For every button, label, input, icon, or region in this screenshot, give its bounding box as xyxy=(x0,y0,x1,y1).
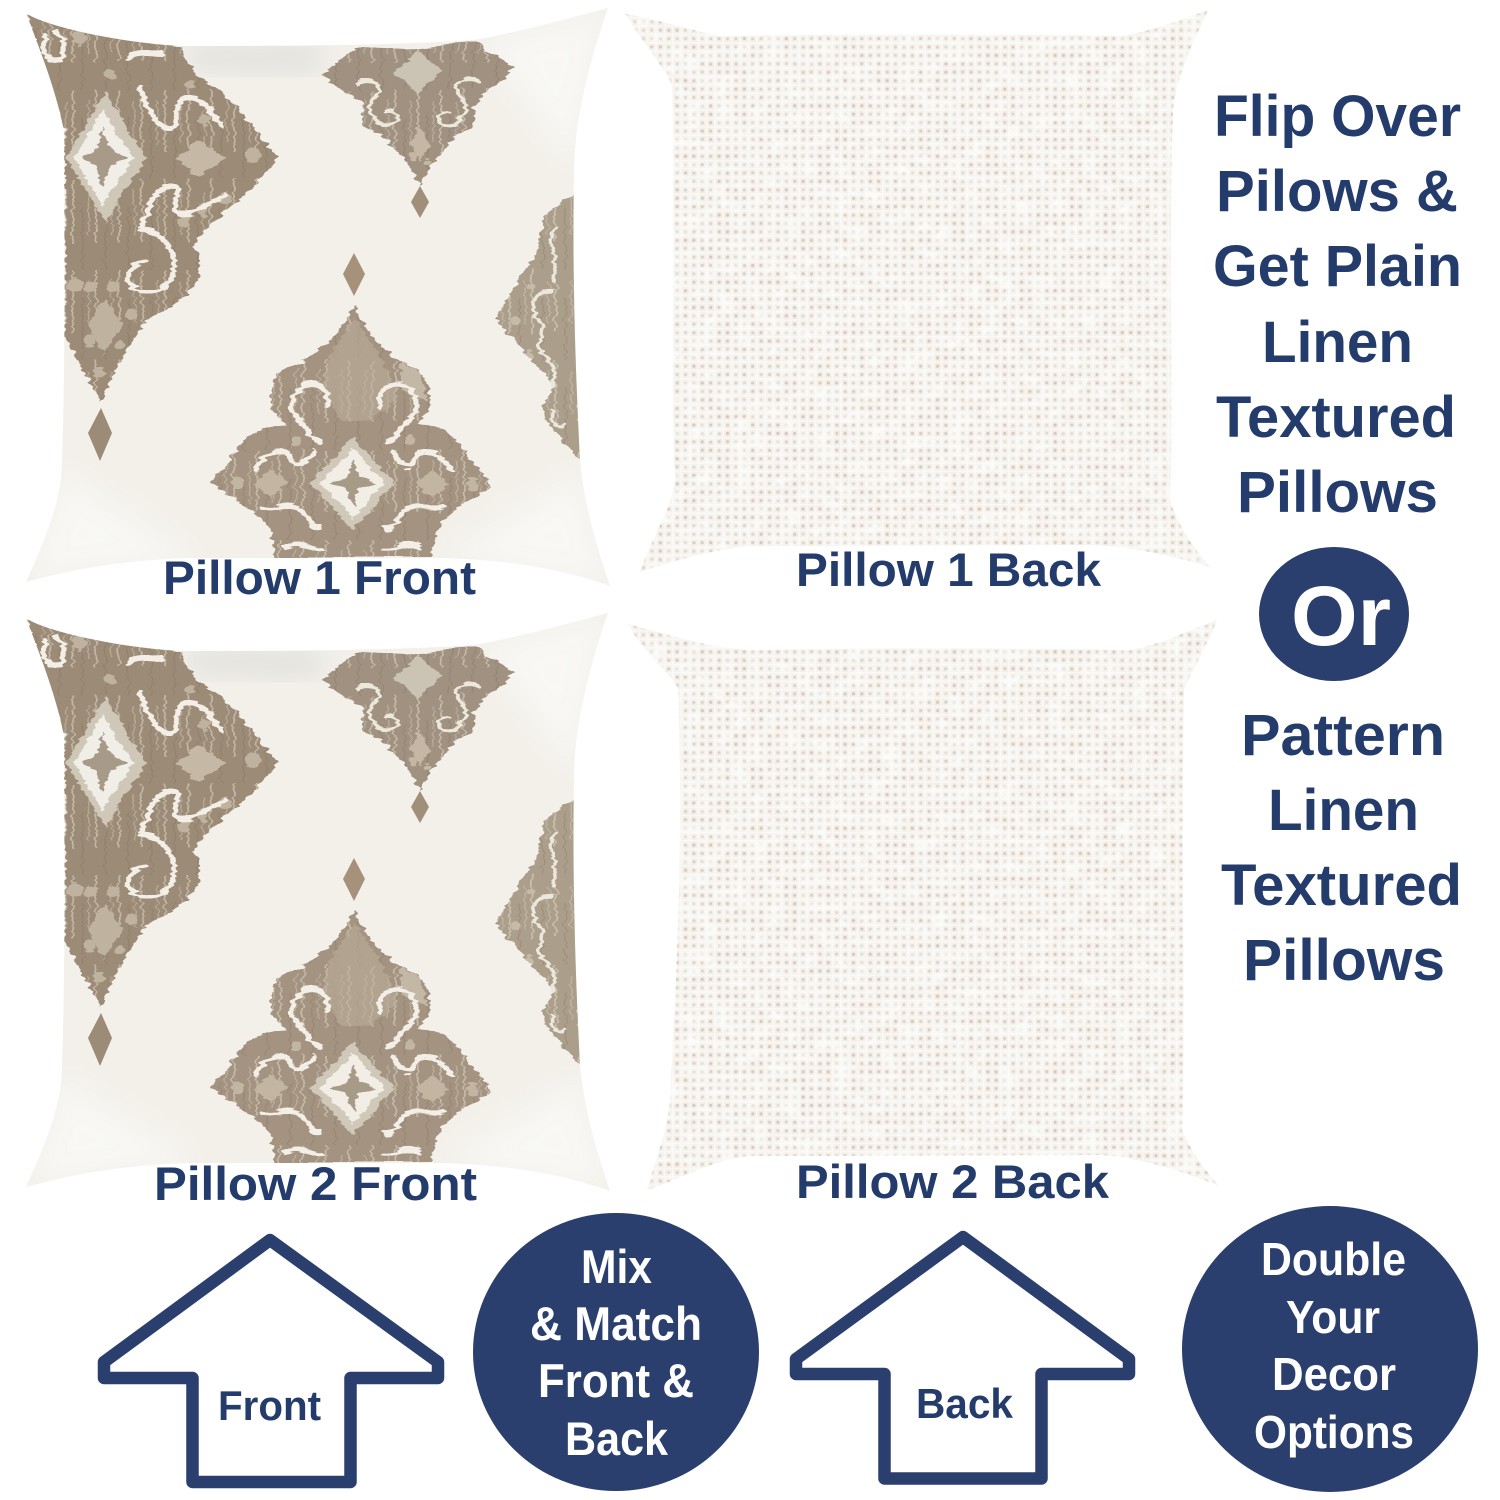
text block: pattern: Pillows xyxy=(1243,928,1445,993)
text block: flip over: Flip Over xyxy=(1214,84,1461,149)
badge: mix and match: Front & xyxy=(538,1354,694,1407)
text block: flip over: Textured xyxy=(1216,385,1456,450)
label: pillow 2 front: Pillow 2 Front xyxy=(154,1157,477,1210)
badge: mix and match: Back xyxy=(565,1412,669,1465)
pillow 2 front xyxy=(26,613,610,1193)
badge: mix and match: & Match xyxy=(530,1297,702,1350)
pillow 2 back xyxy=(620,615,1225,1195)
text block: pattern: Textured xyxy=(1221,853,1462,918)
badge: or xyxy=(1259,547,1409,681)
label: pillow 2 back: Pillow 2 Back xyxy=(796,1155,1110,1208)
text block: pattern xyxy=(1221,703,1462,993)
label: pillow 1 back: Pillow 1 Back xyxy=(796,543,1102,596)
text block: flip over: Pilows & xyxy=(1216,159,1458,224)
badge: mix and match: Mix xyxy=(581,1240,652,1293)
text block: flip over: Pillows xyxy=(1237,460,1438,525)
pillow 1 front xyxy=(26,8,610,588)
text block: pattern: Pattern xyxy=(1241,703,1445,768)
arrow: front xyxy=(104,1240,438,1482)
arrow: front: Front xyxy=(218,1382,321,1429)
badge: double your decor: Options xyxy=(1254,1406,1414,1458)
text block: flip over: Get Plain xyxy=(1213,234,1462,299)
badge: double your decor: Double xyxy=(1261,1233,1406,1285)
pillow 1 back xyxy=(620,5,1215,580)
badge: double your decor: Your xyxy=(1286,1291,1380,1343)
badge: mix and match xyxy=(473,1213,759,1491)
badge: double your decor xyxy=(1182,1206,1478,1492)
badge: double your decor: Decor xyxy=(1272,1348,1396,1400)
text block: flip over xyxy=(1213,84,1462,525)
text block: flip over: Linen xyxy=(1262,310,1413,375)
text block: pattern: Linen xyxy=(1268,778,1419,843)
arrow: back: Back xyxy=(916,1380,1014,1427)
arrow: back xyxy=(796,1237,1129,1478)
label: pillow 1 front: Pillow 1 Front xyxy=(163,551,476,604)
badge: or: Or xyxy=(1291,569,1391,663)
